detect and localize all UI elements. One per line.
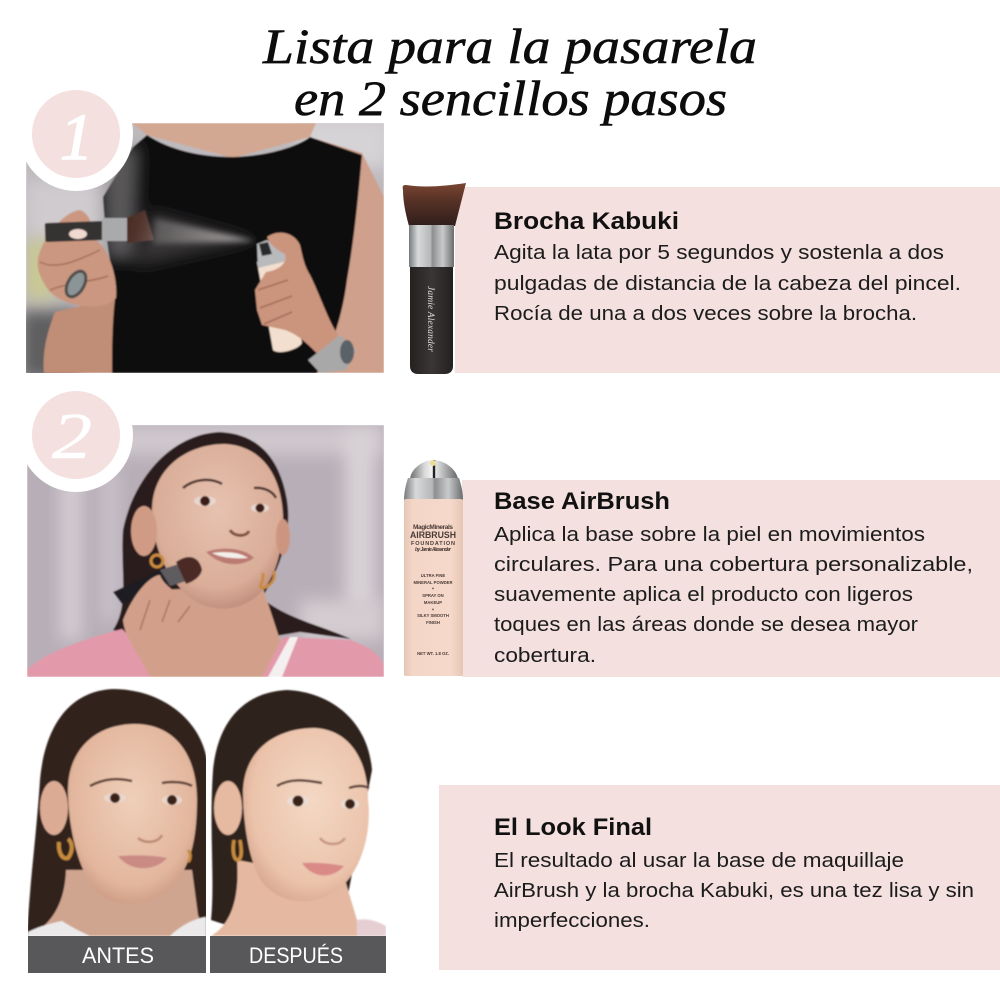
title: en 2 sencillos pasos — [294, 70, 727, 126]
badge: step number 2 — [19, 378, 133, 492]
heading: El Look Final: El Look Final — [494, 814, 652, 841]
label: DESPUÉS — [210, 936, 386, 973]
icon: AirBrush foundation can: SPRAY ON — [422, 593, 444, 598]
badge: step number 2: 2 — [52, 400, 92, 473]
icon: AirBrush foundation can: FINISH — [426, 620, 440, 625]
panel: final look description background — [439, 785, 1000, 970]
title — [262, 18, 757, 126]
label: ANTES — [28, 936, 206, 973]
icon: AirBrush foundation can: FOUNDATION — [411, 541, 455, 547]
text: step 2 instructions — [494, 524, 973, 667]
icon: AirBrush foundation can: NET WT. 1.8 OZ. — [417, 651, 449, 656]
text: step 2 instructions: circulares. Para una cobertura personalizable, — [494, 554, 973, 576]
text: step 1 instructions: Rocía de una a dos veces sobre la brocha. — [494, 303, 917, 325]
text: step 2 instructions: suavemente aplica el producto con ligeros — [494, 584, 913, 606]
panel: step 2 description background — [462, 480, 1000, 677]
photo: step 1 spraying foundation onto the brush — [20, 118, 390, 380]
icon: AirBrush foundation can: by Jamie Alexander — [415, 547, 452, 553]
heading: Base AirBrush: Base AirBrush — [494, 488, 670, 515]
icon: AirBrush foundation can: ULTRA FINE — [421, 573, 445, 578]
text: final look description: El resultado al usar la base de maquillaje — [494, 850, 904, 872]
photo: before portrait — [27, 689, 207, 936]
text: final look description: imperfecciones. — [494, 910, 650, 932]
icon: kabuki brush product — [403, 183, 466, 374]
text: final look description: AirBrush y la brocha Kabuki, es una tez lisa y sin — [494, 880, 974, 902]
icon: AirBrush foundation can: MagicMinerals — [413, 524, 453, 531]
text: step 2 instructions: toques en las áreas donde se desea mayor — [494, 614, 918, 636]
photo: step 2 applying foundation to the face — [27, 425, 384, 677]
label: ANTES: ANTES — [82, 943, 154, 968]
heading: Brocha Kabuki: Brocha Kabuki — [494, 208, 679, 235]
text: step 2 instructions: cobertura. — [494, 645, 596, 667]
badge: step number 1 — [19, 77, 133, 191]
photo: after portrait — [211, 690, 386, 936]
icon: AirBrush foundation can: SILKY SMOOTH — [417, 613, 449, 618]
text: step 2 instructions: Aplica la base sobre la piel en movimientos — [494, 524, 925, 546]
title: Lista para la pasarela — [262, 18, 757, 74]
icon: AirBrush foundation can: + — [432, 607, 435, 612]
text: step 1 instructions: pulgadas de distancia de la cabeza del pincel. — [494, 273, 961, 295]
panel: step 1 description background — [455, 187, 1000, 373]
text: step 1 instructions: Agita la lata por 5 segundos y sostenla a dos — [494, 242, 944, 264]
icon: AirBrush foundation can — [404, 460, 463, 676]
icon: kabuki brush product: Jamie Alexander — [425, 286, 435, 352]
label: DESPUÉS: DESPUÉS — [249, 943, 343, 968]
icon: AirBrush foundation can: MINERAL POWDER — [413, 580, 453, 585]
text: step 1 instructions — [494, 242, 961, 325]
icon: AirBrush foundation can: MAKEUP — [424, 600, 442, 605]
icon: AirBrush foundation can: + — [432, 586, 435, 591]
badge: step number 1: 1 — [60, 101, 93, 174]
icon: AirBrush foundation can: AIRBRUSH — [410, 530, 456, 541]
text: final look description — [494, 850, 974, 932]
